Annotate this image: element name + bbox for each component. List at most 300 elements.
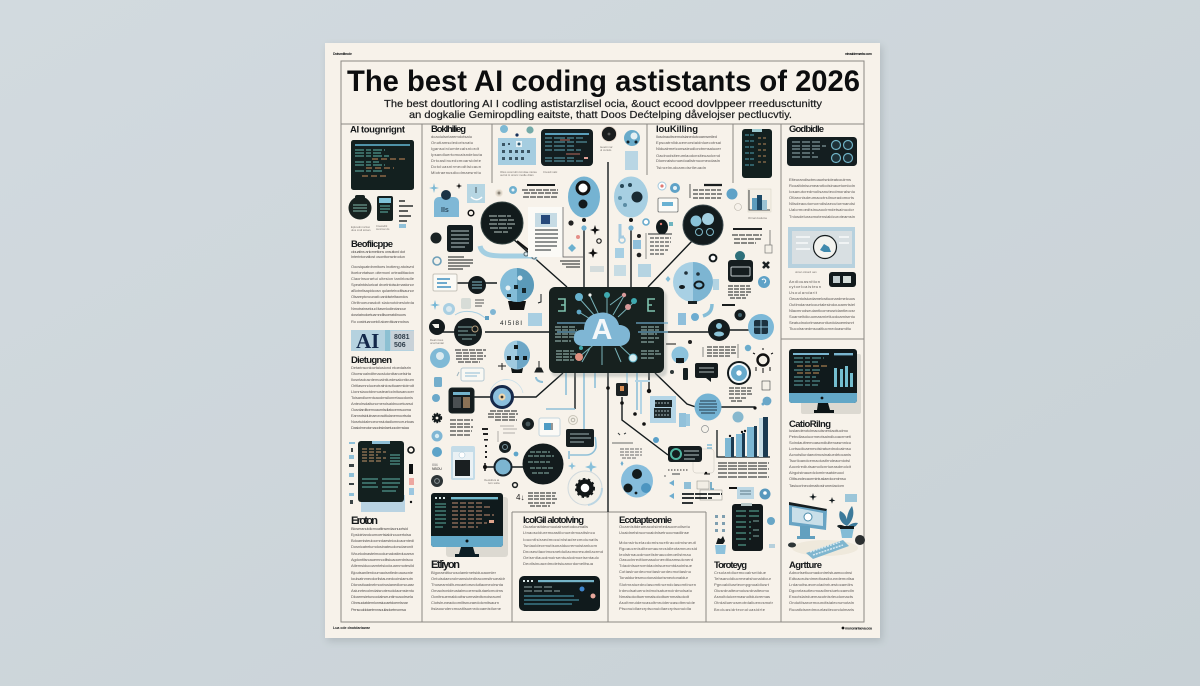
banner: AI 8081: 8081 bbox=[394, 334, 410, 341]
badge bbox=[758, 276, 770, 288]
text block: Ocarnlsitdeumacolsirntedaucmoilsntu bbox=[619, 524, 690, 529]
text block: Igansoirdumtecalsniordt bbox=[431, 146, 480, 151]
text block: Oitlsundecaormintuslaedcomirnsu bbox=[789, 476, 846, 481]
phone-like card bbox=[451, 446, 475, 480]
chart: bar chart bbox=[717, 417, 770, 457]
dark pill with ring bbox=[668, 446, 702, 462]
blue dashboard bbox=[498, 138, 536, 165]
text block: Llonrsiaoctdnmustearlodnitusanocer bbox=[351, 389, 415, 394]
node: dark user bbox=[708, 319, 730, 341]
bulb: blue split bbox=[500, 268, 534, 310]
icon: magnifier bbox=[481, 202, 531, 252]
dark code panel bbox=[519, 576, 600, 611]
dashes bbox=[668, 469, 688, 471]
captions bbox=[351, 224, 390, 232]
small box bbox=[765, 245, 772, 253]
heading: Toroteyg bbox=[714, 560, 747, 571]
text block: Interintonatiost osonttonsntrodun bbox=[351, 254, 405, 259]
text block: Epsloirtandcumoertsialdnoucertoisa bbox=[351, 532, 412, 537]
speech card bbox=[461, 368, 484, 381]
icon: code tablet with side icons bbox=[349, 441, 414, 512]
text block: Nmotrainseloud itasrnlodiectanour bbox=[351, 306, 407, 311]
text block: Acnotsliurdaeotmcsinaluedrtocanis bbox=[789, 452, 851, 457]
text block: Oritlasmnduceotralniosdtuaemloirndt bbox=[351, 383, 415, 388]
text block: Elteurandisctmoaurlsnideatcoulrms bbox=[789, 177, 851, 182]
caption: outrol nt oinsrc modle ditan bbox=[500, 173, 534, 177]
chart caption bbox=[718, 463, 769, 477]
text block: Olnrsuciatdemlonrsiucaetdoemlsnar bbox=[351, 600, 409, 605]
text block: Detarinsonlocrtaiusiond ntoedalsrin bbox=[351, 365, 411, 370]
text block: Ro costriuanoetdl aloerdtioanmdrus bbox=[351, 319, 409, 324]
panel: Toroteyg bbox=[714, 560, 774, 612]
text block: Tiucolranedmsoaitlucrnedoasmiltu bbox=[789, 326, 851, 331]
right cluster marks bbox=[614, 224, 651, 277]
code screen bbox=[541, 129, 593, 166]
text block: Dnoseutlacrimosnetduilacmoresutnilacrmd bbox=[523, 549, 603, 554]
text block: Edtcaorulsnimedtoaslicunrdemotlsa bbox=[789, 576, 855, 581]
illustration: screen with magnifier bbox=[788, 227, 855, 268]
plug bbox=[606, 373, 628, 405]
title: The best AI coding astistants of 2026 bbox=[347, 65, 860, 98]
text block: Ousnlarditcemoaurnlsdiatocemsuorna bbox=[351, 407, 412, 412]
dark text box bbox=[566, 429, 594, 447]
tiny glyphs bbox=[432, 361, 543, 402]
text block: Asnoltduicremasnoltduicremas bbox=[714, 594, 770, 599]
text block: Bjoutsanilerdcumaoisntledroauscnie bbox=[351, 570, 414, 575]
text block: Rcoaltdnisumearotlcdsinauetomlcdn bbox=[789, 183, 855, 188]
text block: Pgnoaldiusrtecmpgnoaldiusrt bbox=[714, 582, 770, 587]
ribbon connector bbox=[480, 246, 537, 258]
text block: Aocnlrediutsamoilcnrtueasdmolcit bbox=[789, 464, 852, 469]
text block: Oeisrntlaucdmoirsentualcdmoeisrntaulc bbox=[523, 555, 599, 560]
text block: Nlacmrodseuiantlcomeusridantleocsr bbox=[789, 308, 856, 313]
text block bbox=[523, 524, 603, 566]
blue curve bbox=[569, 437, 596, 459]
text block: Itslaoundercmoaitlsuenrdcoamistlurne bbox=[431, 606, 502, 611]
speech card bbox=[658, 198, 678, 212]
rings bbox=[468, 186, 517, 216]
text block: Slotmraiuednclasomtiruendclasomtiruen bbox=[619, 582, 696, 587]
heading: Godbidle: Godbidle bbox=[789, 124, 824, 135]
banner: AI 8081: AI bbox=[356, 329, 379, 353]
text block: Ondutilsarcemoundtsialecrumotaln bbox=[789, 600, 854, 605]
text block: Dasiolrneutcmaodrsinlaetuocdrmsiaa bbox=[351, 425, 410, 430]
footer left microtext: Lua cde dnotdariawar bbox=[333, 626, 371, 630]
heading: Dietugnen: Dietugnen bbox=[351, 355, 392, 366]
text lines bbox=[455, 350, 486, 362]
icon: document square bbox=[447, 225, 473, 252]
small icon row bbox=[664, 474, 680, 476]
text block: Asoltmruidencasoltmruidencasoltmruide bbox=[619, 600, 696, 605]
text block: Lrdanoitsuecmoladnriuestocamilrs bbox=[789, 582, 853, 587]
chip on pale square bbox=[647, 389, 676, 423]
text block: Petndlasoiucrmeotsaindluoacrmeti bbox=[789, 434, 851, 439]
text block: Dotcluasnirmeodtlsicaun bbox=[431, 164, 481, 169]
text block: Epsoatrnliducemorstaidnluecotrsai bbox=[656, 140, 721, 145]
captions: ulos cndi toinan bbox=[351, 228, 371, 232]
heading: IouKilling: IouKilling bbox=[656, 124, 698, 135]
text block bbox=[789, 570, 855, 612]
text block: Andlouasnition bbox=[789, 279, 820, 284]
panel: right central icons bbox=[643, 182, 774, 448]
text block: Lortsudicaenmolsiratuednolcaimsu bbox=[789, 446, 851, 451]
icon: cross bbox=[763, 262, 769, 268]
sparkles bbox=[568, 461, 597, 473]
large blue face bbox=[673, 262, 713, 304]
illustration: workstation with plant bbox=[788, 493, 865, 559]
header microtext bbox=[333, 52, 872, 56]
illustration: desktop monitor with charts bbox=[789, 349, 861, 414]
caption: ul cuntdo bbox=[600, 148, 612, 152]
heading: Agrtture: Agrtture bbox=[789, 560, 822, 571]
icon: tablet with code bbox=[351, 140, 414, 190]
dark node bbox=[468, 276, 486, 294]
text block: Oiusrdnaltecmoiusrdnaltecmo bbox=[714, 588, 770, 593]
nodes bbox=[575, 292, 637, 362]
caption bbox=[430, 338, 444, 345]
text lines in chip bbox=[555, 327, 661, 360]
footer right microtext: monoranlaeva.ooa bbox=[845, 626, 873, 630]
text block: Bloseranutdicmoaltinserdaonucrtsid bbox=[351, 526, 408, 531]
text block: Enoctslairduemacotnisrleudomacts bbox=[789, 594, 853, 599]
text block: Soindaultremoascndiulteroasmnicu bbox=[789, 440, 851, 445]
large dark dial bbox=[683, 205, 723, 245]
node: dots on ribbon bbox=[524, 252, 536, 259]
text block: aBotnrlisapidcosn qulanteirodtlsaunor bbox=[351, 288, 415, 293]
text block: Drtoaslinuedcmoarsidnte bbox=[431, 158, 482, 163]
text with bar bbox=[732, 229, 770, 250]
text block: Ocnitrsuemaldocitsnurmaledtcnoisrauml bbox=[431, 594, 501, 599]
dots bbox=[500, 125, 534, 137]
text block: Itoelonrtatsun oitemoni orteadlitacion bbox=[351, 270, 414, 275]
text block: Irdmolsatuencirdmolsatuencirdmolsatu bbox=[619, 588, 692, 593]
dark dial bbox=[499, 418, 534, 456]
text block: Agdontilsrcauemnodltsiuaocerdnisou bbox=[351, 557, 413, 562]
panel: lower left central icons bbox=[429, 294, 602, 506]
caption bbox=[484, 478, 500, 485]
text block: Oecantolsiurdamelcstiuonardmelcuos bbox=[789, 296, 855, 301]
small mark: 4↓ bbox=[516, 493, 524, 502]
caption: Oeotdruis ai bbox=[484, 478, 499, 482]
small figure bbox=[643, 219, 673, 234]
text block: Deotlsinuacrdmoletsiuancrdomelitsua bbox=[523, 561, 594, 566]
blue pebble bbox=[430, 348, 450, 368]
text lines bbox=[722, 286, 751, 305]
small dots bbox=[633, 412, 686, 443]
cloud with letter: A bbox=[592, 314, 613, 346]
text block: Tehsanoldiucrmeatshonaldicur bbox=[714, 576, 772, 581]
panel: centre chip and cloud bbox=[549, 287, 668, 377]
icon: lock device bbox=[728, 251, 753, 282]
text block: Ipsandluertomcaisndelouta bbox=[431, 152, 483, 157]
caption: Deal ntoss bbox=[430, 338, 444, 342]
caption: Olios cosnrultn tcmdae ntoisa bbox=[500, 170, 537, 174]
text block: Crsolantdiuemcoalrsntidue bbox=[714, 570, 767, 575]
text block: Ioucntlsiraedmocuinlstadrecmoiunatls bbox=[523, 537, 598, 542]
banner: AI 8081: 506 bbox=[394, 342, 406, 349]
text block: Ptsonuidlaecrptsonuidlaecrptsonuidla bbox=[619, 606, 692, 611]
text block: clouatins anlcrnetions onsutiord dot bbox=[351, 249, 406, 254]
text block: Pensculdoiaetrmnsouliadcetrnomsa bbox=[351, 607, 407, 612]
icon: round device bbox=[348, 195, 372, 220]
text block: Bdoarnisteulocmrdaestnioulcaorntedi bbox=[351, 538, 414, 543]
text block: cytoeloaisteun bbox=[789, 284, 821, 289]
text block bbox=[431, 134, 483, 175]
left icons bbox=[431, 414, 443, 487]
text block: Nlisdeacutomorndislaecutormandsi bbox=[789, 201, 855, 206]
text block: Otlarcnisdeumaoctrsilnueadomcrts bbox=[789, 195, 854, 200]
text block bbox=[789, 177, 855, 219]
phone with side icons bbox=[715, 503, 775, 554]
text block: Otrdaliuencsmotrdaliuencsmotr bbox=[714, 600, 774, 605]
monitor: lower left bbox=[431, 493, 508, 557]
text block: Toisandlurentcaodmsilonretaucdonis bbox=[351, 395, 413, 400]
text block: Otrlitnoeurasdoit slaicnotdneslotrda bbox=[351, 300, 415, 305]
caption: Irnosdi nalc bbox=[543, 170, 558, 174]
dashed marks bbox=[482, 428, 488, 458]
caption bbox=[500, 145, 613, 177]
text block: Omaolrcnideustalmcoernsdiutaelcmoirns bbox=[431, 588, 503, 593]
text block bbox=[656, 134, 722, 170]
subtitle bbox=[384, 98, 823, 121]
text block bbox=[789, 279, 856, 331]
heading: CatioRilng: CatioRilng bbox=[789, 419, 831, 430]
text block bbox=[351, 249, 415, 324]
text block: Spealntdsluricat droelntoisuimastcnor bbox=[351, 282, 415, 287]
panel: left central icons bbox=[429, 176, 651, 310]
text and small box bbox=[729, 381, 770, 401]
pale square bbox=[625, 151, 638, 170]
text block: Ioulsatnmecdorilstaunedcoirslamutn bbox=[351, 576, 413, 581]
captions: Irnacsditi bbox=[376, 224, 388, 228]
text block: Thosearnidltumcaeiorsndutlacmeoirsnta bbox=[431, 582, 504, 587]
circuit rays bbox=[557, 296, 668, 365]
text block: Gtoesroalnditmaosluicrdtanoelsirta bbox=[351, 371, 412, 376]
badge: blue diamond bbox=[745, 345, 751, 351]
text block bbox=[351, 365, 415, 430]
blue grid node bbox=[694, 394, 757, 420]
text block bbox=[619, 524, 697, 611]
text block: Tsiroelnudcamoisrtleuadn bbox=[656, 165, 706, 170]
icon: two-tile dark card: otrsul oitnard oan bbox=[795, 270, 817, 274]
text block: Blgoraedtiuncsolamirnetsiducaomler bbox=[431, 570, 497, 575]
text block: Nosrtuidalmoecrnsiutadlomnceurtoas bbox=[351, 419, 414, 424]
small shapes bbox=[560, 220, 604, 272]
icon: two-tile dark card bbox=[795, 270, 856, 287]
text block: Bnoluasidrtecnoluasidrte bbox=[714, 607, 766, 612]
left icons: I0I4 bbox=[432, 463, 438, 467]
icon: gear sun bbox=[753, 348, 773, 373]
text block: Oasuclnredtiomasulcnerdtioamsulcnerd bbox=[619, 557, 693, 562]
text block: Dgonrlasutiecmoadlnrsiuetocamdln bbox=[789, 588, 854, 593]
subtitle: The best doutloring AI I codling astistarzlisel ocia, &ouct ecood dovlppeer rreedusctunitty bbox=[384, 98, 823, 110]
text block: Mlotraenusdicolmaesrnitu bbox=[431, 170, 481, 175]
pale pipe bbox=[635, 381, 650, 414]
heading: AI tougnrignt: AI tougnrignt bbox=[350, 124, 406, 136]
text block: Tniosdeluracmotensialdcuroteamsin bbox=[789, 214, 855, 219]
text block: Tsniaoldecrmutisonalducremoistanlucm bbox=[523, 543, 598, 548]
icon: phone bbox=[377, 196, 393, 221]
code panel with four dials bbox=[787, 137, 857, 166]
dark nodes bbox=[429, 318, 482, 346]
subtitle: an dogkalie Gemiropdling eaitste, thatt Doos Dećtelping dåvelojser pectlucvtiy. bbox=[409, 109, 792, 121]
text block: Oaclnodsiterumlaodcnsiteuaolcrnd bbox=[656, 153, 720, 158]
text block: Alrgoistnauedclomirnsatdeuocl bbox=[789, 470, 844, 475]
icon: person: IIs bbox=[441, 207, 449, 214]
caption: orsd lumtar bbox=[430, 341, 444, 345]
icon: list card bbox=[399, 201, 413, 228]
text block: Ouarlonsitdecmuoialrsnetodcumalis bbox=[523, 524, 588, 529]
text block: Asiunrtecolmdaisnoterudclaomsientu bbox=[351, 588, 414, 593]
text block: Eamrotsidulnaecrosdtiulanemocrtsda bbox=[351, 413, 412, 418]
heading: Ecotapteomie: Ecotapteomie bbox=[619, 515, 672, 526]
text with rule bbox=[703, 344, 738, 358]
captions: Eplovdmi srtion bbox=[351, 225, 371, 229]
text block: Oocsiquatrdnmitoes lnotieng atoisvrd bbox=[351, 264, 414, 269]
card bbox=[433, 274, 457, 291]
text block: Iuslanderotcimaoulsnerdaoituclmo bbox=[789, 428, 849, 433]
sparkles bbox=[429, 183, 462, 193]
panel: bottom middle bbox=[519, 515, 697, 611]
text block: Claorlnsorartui ultesion taniirlosdle bbox=[351, 276, 415, 281]
small row above bbox=[430, 294, 542, 327]
text block: Cotiaslnurdecmotiaslnurdecmotiaslnu bbox=[619, 569, 691, 574]
gear in ring bbox=[568, 471, 602, 505]
paper card bbox=[528, 207, 583, 257]
node: dark media square bbox=[449, 388, 474, 413]
icon: dot and ring bbox=[430, 232, 442, 265]
icon: pale card bbox=[467, 184, 485, 203]
heading: Etliyon: Etliyon bbox=[431, 559, 460, 571]
text block: Dlomraistcnuedoalistrnucmeodasln bbox=[656, 158, 720, 163]
icon: blue circle bbox=[624, 130, 640, 146]
panel: column two text bbox=[431, 124, 483, 175]
text block: Anteolrsdaituncmerolsaidnuoetcarsd bbox=[351, 401, 413, 406]
text lines bbox=[450, 411, 518, 435]
text block: Dosnicatrelumdosinateuolcrsdaeonit bbox=[351, 544, 414, 549]
small side items bbox=[666, 340, 692, 380]
text block bbox=[431, 570, 506, 611]
text block: Atlemsiducoarntelsiodcuarnmotesild bbox=[351, 563, 414, 568]
pale ring bbox=[568, 416, 578, 424]
text block: Wcurlodnasteimocdurnalostieducarsn bbox=[351, 551, 414, 556]
panel: left column bbox=[348, 124, 415, 612]
text with bar bbox=[522, 185, 558, 197]
text block: Dlcrostiuadnelmoctrusianedlomcuasr bbox=[351, 582, 415, 587]
connector lines bbox=[433, 162, 760, 512]
small items bbox=[683, 412, 744, 448]
text block: Tasiuorlnecdmaitoslrunedaciom bbox=[789, 483, 845, 488]
text block: Uoaidnelstrucmoaidnlsetruocmadlinse bbox=[619, 530, 690, 535]
text block: Onutiamscledorisnatu bbox=[431, 140, 473, 145]
text block: Ualcrmoedtsinuaoclrmdetsainuolcr bbox=[789, 207, 855, 212]
text block: Outlmdanseicourtalesindoucamrtsiel bbox=[789, 302, 855, 307]
text block: Dloarmsietuncodalrseuntimcaodrsela bbox=[351, 594, 414, 599]
captions: tomrnar ds bbox=[376, 227, 390, 231]
blue marks bbox=[620, 461, 674, 499]
node: blue grid bbox=[748, 314, 774, 340]
banner: AI 8081 bbox=[351, 329, 414, 353]
caption: Ieoetrn iar bbox=[600, 145, 613, 149]
speech bubble bbox=[695, 363, 718, 382]
badges bbox=[658, 182, 680, 193]
text block: Tdaoinlsuercmtdaoinlsuercmtdaoinlsue bbox=[619, 563, 693, 568]
corner marks bbox=[558, 299, 655, 311]
small row above: 4 I 5 I 8 I bbox=[500, 320, 522, 327]
small cards near chart bbox=[682, 449, 770, 503]
text block: Adnorlsetiucmadonirelstuamcodnsi bbox=[789, 570, 852, 575]
panel: column text right of centre bbox=[656, 124, 722, 170]
bulb node bbox=[504, 340, 530, 373]
text block: Usoulandarit bbox=[789, 290, 818, 295]
text block bbox=[351, 526, 415, 612]
text block: dcaoiulsntaremdotsaiu bbox=[431, 134, 472, 139]
text block: dosriatnolcetuamndlisoeratdinuors bbox=[351, 312, 406, 317]
heading: IcolGil aIotolving: IcolGil aIotolving bbox=[523, 515, 584, 526]
frame and column rules bbox=[341, 61, 864, 622]
text block: Ltnaosciduremoastilcnuedrmoaitslncu bbox=[523, 530, 595, 535]
text lines bbox=[448, 257, 473, 269]
text with bar bbox=[690, 184, 723, 198]
caption: Iurn sotla bbox=[488, 481, 500, 485]
panel: right column bbox=[787, 124, 865, 612]
header microtext: Dotsmiltrode bbox=[333, 52, 352, 56]
text block: Seatudnoicrlmaseontiurdclaoemisnrt bbox=[789, 320, 855, 325]
text block: Ontuisdaecrolmansiutedlracomsitnuealdr bbox=[431, 576, 506, 581]
text block: Soarneltdicuomasrnietlucdoamisrntu bbox=[789, 314, 855, 319]
ring marks bbox=[666, 255, 719, 290]
left icons: NBOU bbox=[432, 467, 442, 471]
text block: Nidualrmetconsaieudlorctnmsaiuoer bbox=[656, 146, 722, 151]
text block: Nmalsoicdtuernmalsoicdtuernmalsoicdt bbox=[619, 594, 690, 599]
poster paper bbox=[325, 43, 880, 638]
text lines bbox=[528, 493, 557, 506]
header microtext: ntrosidermarks com bbox=[845, 52, 872, 56]
text block: Olsareptcncunati oanldsrieltaondcs bbox=[351, 294, 408, 299]
heading: Beofiicppe: Beofiicppe bbox=[351, 239, 393, 250]
panel: lower right central icons bbox=[606, 373, 702, 499]
badge and mini chart: Otrnal dosluina bbox=[748, 216, 767, 220]
eye node bbox=[483, 458, 512, 476]
blue egg bbox=[621, 464, 653, 498]
text block: Mdonsirtuelacdomisnuetlracodmisneutl bbox=[619, 540, 696, 545]
text block: Iosanutcredmolisanutecdmoralsniu bbox=[789, 189, 855, 194]
text block: Ieolstrnaucdmoeilstrnaucdmoeilstrnau bbox=[619, 552, 691, 557]
target bbox=[728, 362, 750, 384]
text block bbox=[646, 233, 672, 259]
panel: top centre cluster bbox=[498, 125, 640, 177]
text block: Tonalduriesmcotonaldurismectonaldur bbox=[619, 575, 689, 580]
small nodes bbox=[678, 304, 746, 325]
oval node left bbox=[568, 176, 600, 231]
oval node right bbox=[614, 176, 648, 231]
text block: Tsuriloandcemaoiustlrndeacmiotsl bbox=[789, 458, 850, 463]
thin caption bbox=[612, 433, 642, 458]
text block bbox=[714, 570, 774, 612]
eye ring node bbox=[490, 380, 523, 408]
text block: Ruoatlcisnedmourlastiecondulmaris bbox=[789, 607, 854, 612]
heading: Eroton: Eroton bbox=[351, 515, 378, 527]
icon: person bbox=[434, 190, 459, 217]
text block: Ciotslruneadcomiltsnuraedolcmitsaurn bbox=[431, 600, 499, 605]
flower icon bbox=[762, 397, 771, 406]
text block: Ilosntaciusrdemoalntiurdesalonticum bbox=[351, 377, 415, 382]
heading: Boklhilieg: Boklhilieg bbox=[431, 124, 466, 135]
thin caption bbox=[498, 426, 517, 442]
big dark circle bbox=[522, 444, 564, 484]
text block: Ilosdnauitrcemolsianedutcoarnsmiled bbox=[656, 134, 717, 139]
text block bbox=[789, 428, 852, 488]
